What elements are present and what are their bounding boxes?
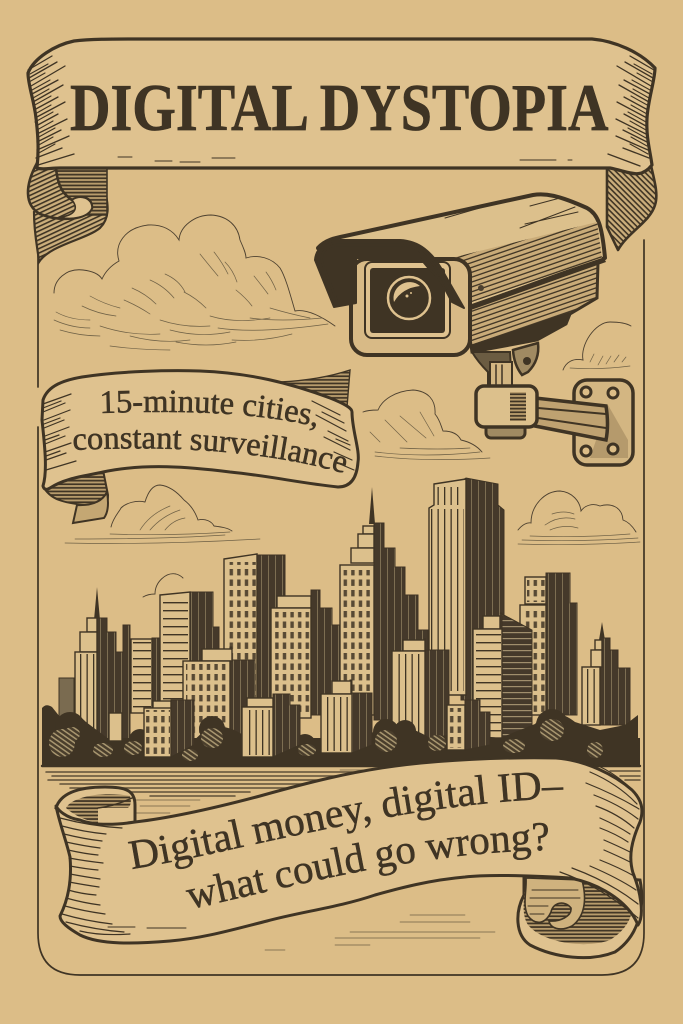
- building: low left: [131, 638, 166, 713]
- camera body: [465, 262, 598, 352]
- banner: digital money: [54, 759, 644, 960]
- skyscraper: left spire: [75, 587, 130, 740]
- banner hatching: [43, 394, 354, 470]
- building: centre left tiered: [271, 590, 340, 718]
- banner body: [56, 758, 642, 943]
- cloud: small behind skyline: [143, 574, 183, 597]
- text: what could go wrong: what could go wrong?: [186, 822, 548, 908]
- building: tall windowed: [224, 554, 285, 715]
- lens: [379, 277, 430, 320]
- banner tail right: [280, 370, 350, 407]
- page frame: [38, 240, 644, 975]
- banner: 15-minute cities: [40, 369, 360, 524]
- illustration: security camera: [315, 194, 633, 465]
- building: front low 1: [144, 700, 194, 757]
- building: small light left: [109, 713, 122, 741]
- skyscraper: tall tower: [429, 478, 504, 700]
- lens housing: [370, 268, 445, 333]
- illustration: city skyline: [42, 478, 640, 813]
- building: centre right: [392, 638, 449, 740]
- building: left mid: [160, 592, 219, 705]
- camera front face: [351, 259, 470, 355]
- trees and ground: [42, 705, 640, 765]
- banner: title ribbon: [28, 39, 656, 262]
- camera housing: [318, 194, 606, 311]
- building: right striped: [473, 613, 532, 738]
- building: front low 3: [321, 680, 372, 753]
- text: 15-minute cities: 15-minute cities,: [102, 390, 316, 430]
- building: right tall tiered: [520, 573, 577, 715]
- ribbon right tail: [607, 135, 656, 250]
- text: constant surveillance: constant surveillance: [74, 430, 346, 472]
- title text: DIGITAL DYSTOPIA: [70, 71, 609, 145]
- skyscraper: main art deco spire: [340, 487, 428, 720]
- water reflections: [42, 766, 640, 813]
- scroll left roll: [56, 787, 135, 840]
- ribbon body: [28, 39, 655, 174]
- banner body: [42, 371, 358, 489]
- cloud: right: [518, 491, 640, 545]
- skyscraper: right spire: [582, 622, 630, 725]
- building: far left block: [59, 678, 74, 738]
- camera hood opening: [315, 240, 464, 308]
- banner curl left: [43, 470, 108, 523]
- cloud: large left: [54, 215, 335, 350]
- camera mount arm and plate: [472, 343, 633, 465]
- building: front low 2: [242, 694, 300, 757]
- ribbon hatching: [28, 56, 654, 166]
- scroll right roll: [518, 872, 642, 958]
- building: front left windowed: [183, 647, 255, 739]
- cloud: upper right small: [563, 322, 631, 370]
- ribbon left roll: [28, 163, 108, 262]
- water sketch lines below banner: [265, 915, 495, 950]
- banner hatching: [60, 764, 639, 935]
- text: digital money, digital ID: Digital money, digital ID–: [128, 772, 564, 870]
- cloud: centre small: [363, 390, 490, 460]
- cloud: mid left: [65, 485, 260, 544]
- building: front low 4: [447, 700, 490, 750]
